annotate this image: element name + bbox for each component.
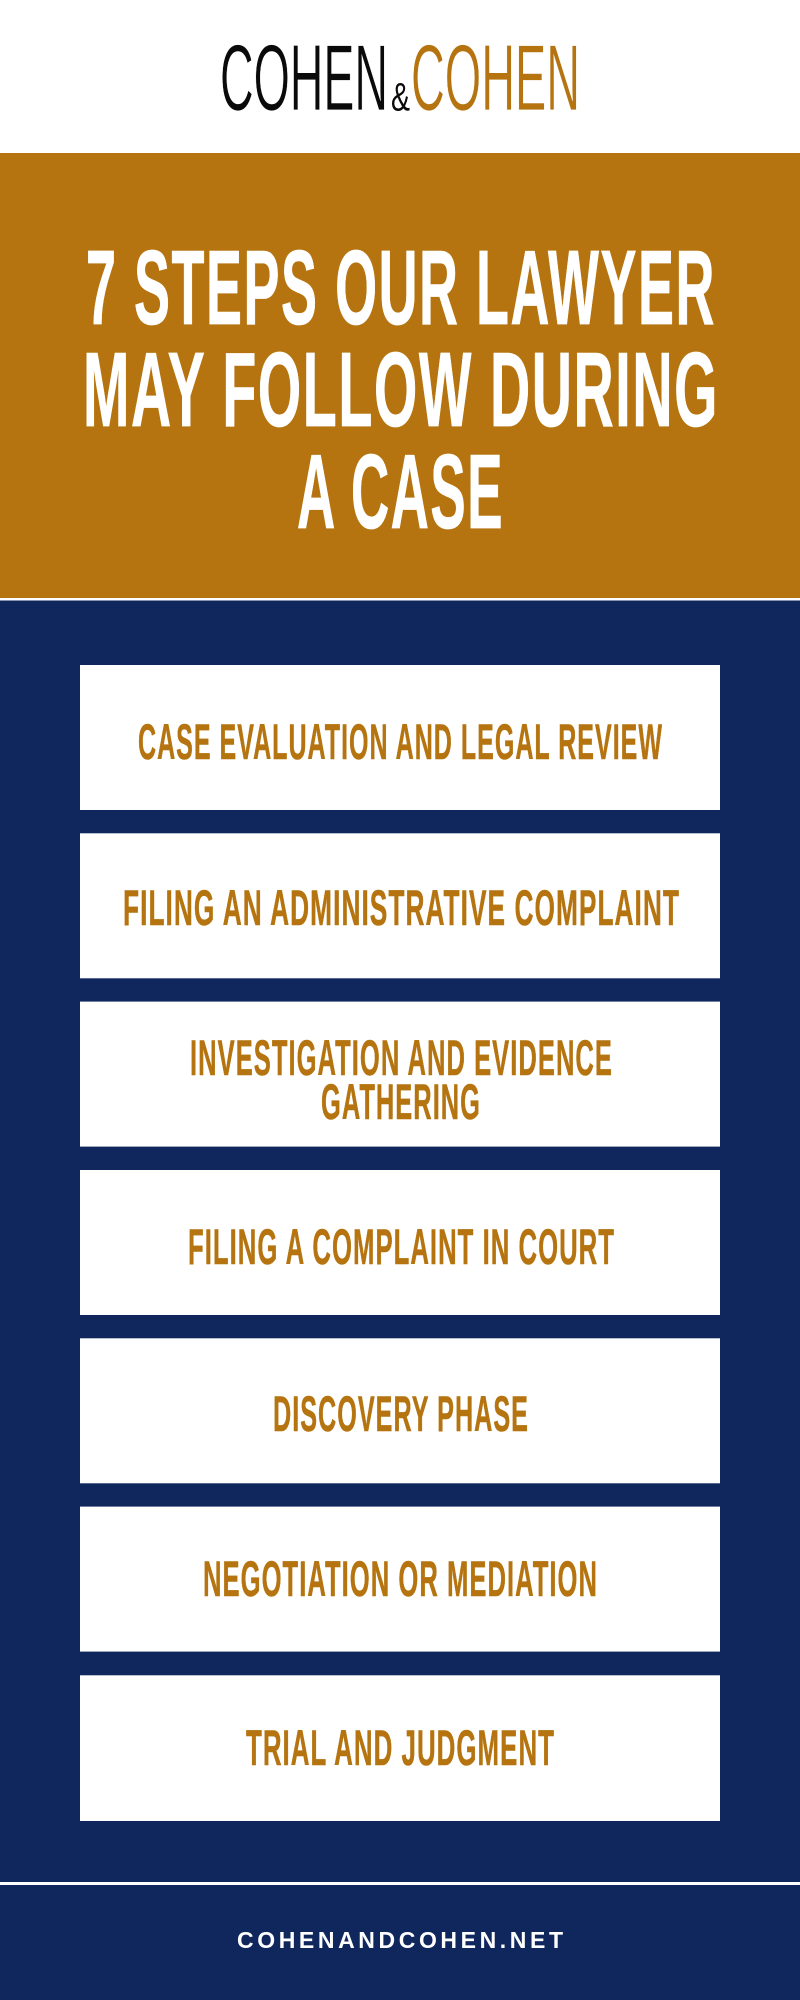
step 5 card: DISCOVERY PHASE [273,1386,529,1442]
logo: Cohen & Cohen: COHEN [220,25,388,130]
step 4 card [80,1170,720,1315]
step 3 card: GATHERING [321,1074,481,1130]
panel: logo header: COHEN [411,25,580,130]
panel: footer [0,1885,800,2000]
panel: title band [0,153,800,598]
title [83,229,719,551]
panel: steps background [0,600,800,1882]
panel: logo header [0,0,800,153]
title: A CASE [297,433,504,551]
step 3 card [80,1002,720,1147]
step 5 card [80,1338,720,1483]
footer website: COHENANDCOHEN.NET [237,1927,563,1953]
logo: Cohen & Cohen: & [391,76,410,120]
step 1 card [80,665,720,810]
step 7 card [80,1675,720,1821]
step 2 card [80,833,720,978]
step 6 card [80,1507,720,1652]
